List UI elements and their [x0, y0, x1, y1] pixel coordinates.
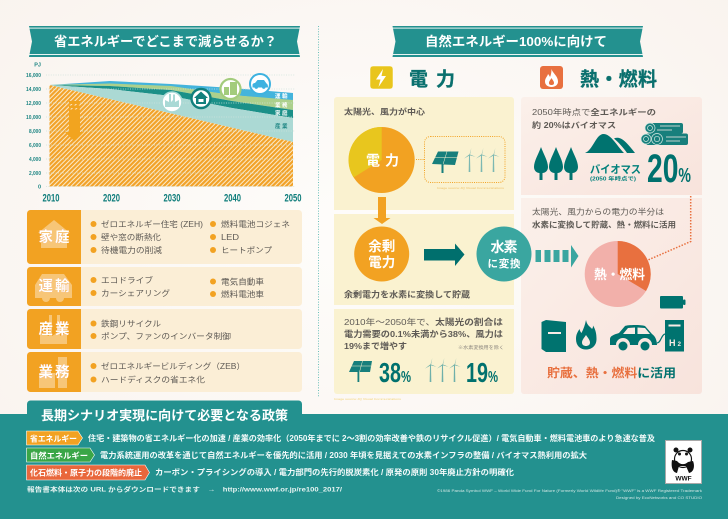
dotted connector: [416, 158, 424, 160]
panel: biomass: [521, 97, 702, 195]
panel: surplus electricity: [334, 210, 514, 305]
stat: 20%: 20%: [647, 147, 691, 191]
panel: business measures: ゼロエネルギービルディング（ZEB）: [101, 361, 245, 371]
stat: wind 19%: 19%: [466, 357, 498, 388]
image credit: Image source:JQ Visual Communications: [334, 397, 402, 401]
footer title: 長期シナリオ実現に向けて必要となる政策: [41, 408, 288, 423]
panel: household measures: [27, 210, 302, 264]
panel: business measures: [27, 352, 302, 392]
business layer: [50, 84, 293, 110]
dotted connector: [648, 196, 691, 260]
icon: solar panel: [349, 361, 372, 382]
y axis labels: 4,000: [29, 157, 41, 163]
label: as of 2050: (2050 年時点で): [590, 176, 636, 182]
panel: industry measures: ポンプ、ファンのインバータ制御: [101, 331, 231, 341]
caption: 貯蔵、熱・燃料 に活用: [547, 365, 676, 380]
panel: household measures: ヒートポンプ: [221, 246, 272, 255]
panel: industry measures: 産業: [38, 320, 70, 338]
panel: transport measures: カーシェアリング: [101, 288, 170, 298]
panel: transport measures: 燃料電池車: [221, 289, 264, 299]
policy row: phase out: 化石燃料・原子力の段階的廃止: [30, 468, 142, 478]
bullet list: [90, 320, 96, 339]
text block: [532, 206, 676, 230]
dashed arrow: [536, 245, 578, 268]
text block: 2010年～2050年で、 太陽光の割合は: [344, 317, 504, 327]
dotted box: solar and wind icons: [424, 136, 505, 182]
policy row: phase out: カーボン・プライシングの導入 / 電力部門の先行的脱炭素化 / 原発の原則 30年廃止方針の明確化: [155, 467, 514, 477]
x axis labels: 2040: [224, 192, 241, 204]
policy row: renewable: [26, 448, 587, 462]
copyright: Designed by EcoNetworks and CO STUDIO: [616, 496, 702, 500]
heading ribbon: energy saving: [29, 26, 300, 57]
text block: 19%まで増やす: [344, 341, 407, 351]
panel: electricity sources: [334, 97, 514, 210]
icon: car silhouette: [35, 274, 72, 302]
transport layer: [50, 81, 293, 101]
heat and fuel pie chart: [585, 241, 651, 307]
panel: transport measures: 運輸: [38, 277, 70, 295]
heading: heat and fuel: 熱・燃料: [580, 68, 657, 90]
text block: [532, 107, 656, 130]
circle: surplus electricity: [354, 226, 409, 282]
panel: solar and wind share: [334, 309, 514, 394]
y axis labels: 14,000: [26, 87, 41, 93]
panel: transport measures: [27, 267, 302, 306]
icon: wind turbines: [425, 358, 460, 382]
report URL: 報告書本体は次の URL からダウンロードできます → http://www.wwf.or.jp/re100_2017/: [27, 484, 342, 494]
x axis labels: 2020: [103, 192, 120, 204]
icon: storage tank: [542, 320, 566, 352]
center dotted divider: [318, 26, 320, 397]
panel: transport measures: 電気自動車: [221, 276, 264, 286]
y axis labels: 10,000: [26, 115, 41, 121]
icon: trees: [534, 147, 578, 180]
copyright: [437, 489, 702, 500]
area chart: energy demand 2010-2050: [26, 62, 302, 204]
heading ribbon: 100% renewable: 自然エネルギー100%に向けて: [425, 34, 607, 49]
x axis labels: [42, 192, 302, 204]
WWF logo: WWF: [675, 476, 692, 482]
heading ribbon: energy saving: 省エネルギーでどこまで減らせるか？: [54, 34, 277, 49]
arrow: to hydrogen: [424, 244, 464, 266]
bullet list: [90, 221, 216, 253]
text block: ※水素変換用を除く: [458, 344, 504, 351]
icon: factory badge: [162, 92, 182, 112]
y axis labels: 6,000: [29, 143, 41, 149]
x axis labels: 2010: [42, 192, 60, 204]
icon: hydrogen pump: H 2: [669, 338, 682, 348]
circle: surplus electricity: 余剰: [368, 239, 395, 254]
panel: household measures: 家庭: [38, 229, 70, 246]
panel: household measures: ゼロエネルギー住宅 (ZEH): [101, 219, 203, 229]
y axis labels: 2,000: [29, 171, 41, 177]
icon: buildings silhouette: [39, 357, 67, 388]
y axis labels: 8,000: [29, 129, 41, 135]
icon: factory silhouette: [40, 315, 67, 344]
icon: flame: [540, 66, 563, 89]
icon: house silhouette: [38, 220, 70, 248]
panel: industry measures: 鉄鋼リサイクル: [101, 318, 161, 328]
panel: industry measures: [27, 309, 302, 349]
y axis labels: 16,000: [26, 73, 41, 79]
layer labels: 家庭: [275, 109, 288, 117]
y axis labels: [26, 62, 41, 190]
electricity pie chart: 電 力: [366, 152, 399, 168]
WWF logo: [666, 440, 702, 484]
y axis labels: 12,000: [26, 101, 41, 107]
text block: 電力需要の0.1%未満から38%、風力は: [344, 329, 504, 339]
icon: solar panel: [432, 152, 458, 173]
panel: household measures: LED: [221, 233, 239, 242]
circle: surplus electricity: 電力: [368, 255, 395, 270]
icon: hills: [585, 134, 635, 153]
footer band: policies: [0, 400, 728, 519]
household layer: [50, 85, 293, 118]
panel: transport measures: エコドライブ: [101, 275, 153, 285]
icon: fuel cell car: [610, 325, 657, 350]
heading: electricity: [370, 66, 455, 90]
layer labels: 運輸: [275, 92, 288, 100]
icon: battery: [660, 296, 686, 308]
panel: business measures: ハードディスクの省エネ化: [101, 374, 205, 384]
bullet list: [90, 363, 96, 382]
panel: household measures: 燃料電池コジェネ: [221, 219, 290, 229]
text block: 水素に変換して貯蔵、熱・燃料に活用: [532, 220, 676, 230]
policy row: energy saving: 住宅・建築物の省エネルギー化の加速 / 産業の効率化（2050年までに 2～3割の効率改善や鉄のリサイクル促進）/ 電気自動車・燃料電池車のより急速な普及: [88, 433, 655, 443]
heading: heat and fuel: [540, 66, 657, 90]
icon: lightning: [370, 66, 393, 89]
panel: household measures: 待機電力の削減: [101, 245, 162, 255]
text block: 太陽光、風力からの電力の半分は: [532, 206, 664, 216]
label: biomass: バイオマス: [590, 163, 641, 176]
heading: electricity: 電 力: [409, 68, 455, 90]
text block: 2050年時点で 全エネルギーの: [532, 107, 656, 117]
industry layer: [50, 85, 293, 142]
image credit: Image source:JQ Visual Communications: [437, 186, 505, 190]
icon: house badge: [192, 89, 210, 108]
caption: 余剰電力を水素に変換して貯蔵: [344, 290, 471, 300]
y axis labels: PJ: [34, 62, 41, 68]
saved energy hatched area: [50, 85, 293, 186]
hydrogen circle: [476, 226, 532, 282]
y axis labels: 0: [38, 184, 41, 190]
text block: [344, 317, 504, 351]
icon: car badge: [250, 74, 270, 94]
reduction arrow: [65, 101, 84, 142]
arrow: down to surplus: [378, 197, 386, 210]
hydrogen circle: に変換: [488, 257, 521, 270]
text block: 約 20%はバイオマス: [532, 120, 616, 130]
heading ribbon: 100% renewable: [392, 26, 643, 57]
policy row: renewable: 電力系統運用の改革を通じて自然エネルギーを優先的に活用 / 2030 年頃を見据えての水素インフラの整備 / バイオマス熱利用の拡大: [100, 450, 587, 460]
heat and fuel pie chart: 熱・燃料: [594, 267, 645, 282]
electricity pie chart: [348, 127, 415, 193]
stat: solar 38%: 38%: [379, 357, 411, 388]
policy row: energy saving: 省エネルギー: [30, 434, 77, 444]
icon: wind turbines: [464, 148, 500, 172]
copyright: ©1986 Panda Symbol WWF – World Wide Fund For Nature (Formerly World Wildlife Fund)® "WWF" is a WWF Registered Trademark: [437, 489, 702, 493]
panel: heat and fuel use: [521, 196, 702, 394]
icon: logs: [641, 123, 688, 145]
panel: household measures: 壁や窓の断熱化: [101, 232, 161, 242]
x axis labels: 2030: [164, 192, 180, 204]
icon: building badge: [220, 79, 240, 99]
arrow head: [374, 210, 390, 224]
hydrogen circle: 水素: [490, 239, 518, 255]
icon: hydrogen pump: [657, 320, 684, 352]
bullet list: [90, 277, 216, 297]
policy row: renewable: 自然エネルギー: [30, 450, 88, 460]
text: solar and wind: 太陽光、風力が中心: [344, 106, 425, 116]
layer labels: 業務: [275, 101, 288, 109]
policy row: phase out: [26, 465, 514, 480]
layer labels: 産業: [275, 122, 288, 130]
x axis labels: 2050: [284, 192, 302, 204]
policy row: energy saving: [26, 431, 655, 445]
panel: business measures: 業務: [38, 363, 70, 381]
layer labels: [275, 92, 288, 130]
icon: flame: [576, 320, 596, 350]
